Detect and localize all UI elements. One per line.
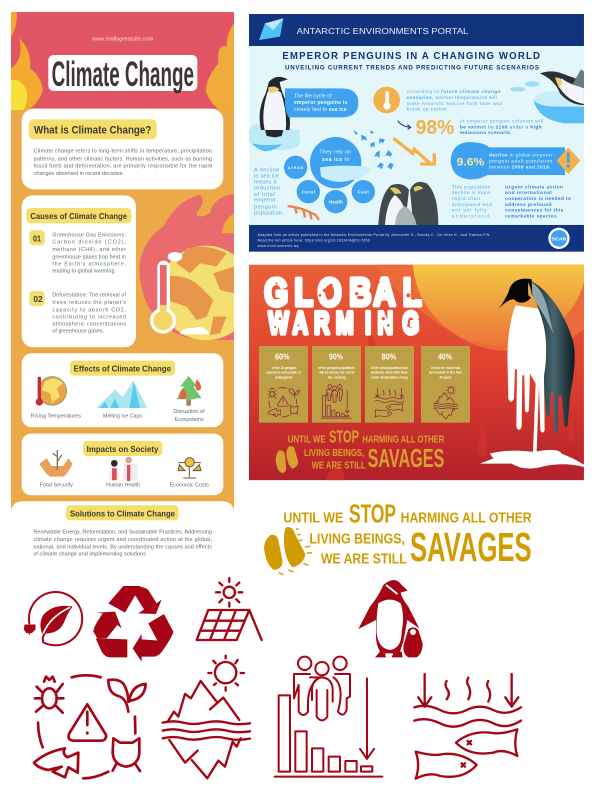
text block: solutions: national, and individual levels. By understanding the causes and effects [33, 544, 212, 550]
icon: left flames [11, 12, 234, 110]
icon: rising temperatures [36, 377, 67, 406]
text block: cause 1: Greenhouse Gas Emissions: [52, 232, 126, 238]
poster background [249, 46, 584, 226]
slogan: standalone: LIVING BEINGS, [309, 531, 405, 547]
header band [249, 14, 584, 46]
text block: population decline: decline is more [452, 190, 490, 196]
heading: solutions: Solutions to Climate Change [70, 508, 175, 518]
card: 80% habitat: of the wild population has [371, 366, 408, 370]
bubble: relies on sea ice: They rely on [319, 150, 351, 156]
label: rising temperatures: Rising Temperatures [31, 413, 81, 419]
footer citation: Adapted from an article published in the Antarctic Environments Portal by Jenouvrier S., Brooks C., De Vries H., and Trathan P.N. [258, 233, 490, 237]
card: 80% habitat: 80% [382, 353, 396, 362]
text block: future scenarios: scenarios, warmer temperatures will [407, 95, 497, 101]
red header band [11, 12, 234, 109]
text block: extinction: emissions scenario. [460, 130, 512, 136]
card: 40% sea ice: of sea ice cover has [431, 366, 460, 370]
panel: Climate Change poster [11, 12, 253, 558]
text block: cause 2: contributing to increased [52, 314, 126, 320]
card: 60% species: species is vulnerable or [266, 371, 302, 375]
slogan: SAVAGES [368, 443, 444, 473]
text block: definition: fossil fuels and deforestation, are primarily responsible for the rapid [34, 164, 212, 170]
card: 80% habitat: under temperature rising [371, 375, 408, 379]
heading: effects [70, 361, 175, 376]
ice floe under penguin [249, 130, 300, 150]
penguin head [499, 279, 532, 309]
panel: poster lower half [249, 130, 584, 252]
icon: krill [288, 206, 319, 220]
text block: sea ice decline: reduction [254, 185, 280, 191]
slogan: standalone [264, 499, 532, 575]
panel: Global Warming poster [249, 264, 584, 480]
text block: urgent action: address profound [505, 202, 552, 208]
poster background [11, 12, 234, 512]
label: disruption of ecosystems: Ecosystems [175, 417, 204, 423]
bubble: fast [352, 180, 375, 203]
callout: life cycle: The life cycle of [294, 93, 332, 99]
penguin belly drips [507, 305, 546, 452]
card: 90% population: the century [328, 375, 346, 379]
melt puddle [480, 450, 584, 468]
text block: population decline: This population [452, 184, 491, 190]
card: 40% sea ice: 40 years [439, 375, 451, 379]
logo: SCAR [548, 228, 570, 249]
text block: cause 2: of greenhouse gases. [52, 329, 104, 335]
icon: penguin with chick [358, 580, 423, 657]
label: economic costs: Economic Costs [170, 482, 209, 488]
text block: cause 1: methane (CH4), and other [52, 247, 126, 253]
text block: future scenarios: According to future climate change [407, 89, 501, 95]
panel: causes of climate change [22, 195, 136, 347]
card: 60% species: 60% [275, 353, 290, 362]
neck highlight [530, 281, 553, 334]
text block: sea ice decline: population. [254, 211, 284, 217]
ice floe shade [252, 143, 282, 151]
card: 90% population: will be lost by the end of [318, 371, 355, 375]
icon: penguin tracks [353, 130, 394, 170]
icon: disruption of ecosystems [177, 376, 202, 406]
slogan: STOP [329, 427, 359, 447]
bubble: health: Health [329, 199, 343, 204]
card: 40% sea ice: decreased in the last [429, 371, 463, 375]
slogan [276, 427, 444, 473]
footer band [249, 225, 584, 252]
bubble: coral: Coral [302, 189, 315, 194]
text block: population decline [452, 184, 492, 220]
label: melting ice caps: Melting Ice Caps [103, 413, 142, 419]
heading: causes [26, 208, 131, 223]
label: disruption of ecosystems [173, 409, 205, 423]
card: 90% population [312, 346, 361, 423]
icons: climate symbols right [275, 580, 521, 779]
logo [259, 18, 283, 40]
text block: extinction: be extinct by 2100 under a high [460, 124, 542, 130]
heading: impacts: Impacts on Society [87, 444, 159, 454]
slogan: standalone: WE ARE STILL [321, 551, 407, 567]
text block: population decline: anticipated and [452, 202, 492, 208]
logo: SCAR: SCAR [552, 236, 567, 242]
text block: sea ice decline: of total [254, 192, 275, 198]
callout: life cycle: emperor penguins is [294, 100, 347, 106]
label: disruption of ecosystems: Disruption of [173, 409, 205, 415]
icon: thermometer badge [373, 87, 400, 113]
heading: effects: Effects of Climate Change [74, 364, 171, 374]
icon: food security [39, 450, 73, 477]
text block: cause 1: the Earth's atmosphere, [52, 261, 126, 267]
icon: melting ice caps [97, 381, 147, 408]
text block: sea ice decline: A decline [254, 168, 279, 174]
text block: future scenarios: break up earlier. [407, 107, 448, 113]
icon: ecosystem warning [268, 388, 300, 417]
panel: Antarctic Environments Portal poster [249, 14, 584, 226]
label: human health: Human Health [106, 482, 140, 488]
badge: 01: 01 [33, 233, 41, 243]
panel: impacts on society [22, 434, 223, 495]
callout: 9.6% decline: 9.6% [457, 156, 484, 168]
slogan: standalone: STOP [349, 499, 396, 529]
text block: solutions: climate change requires urgent and coordinated action at the global, [33, 537, 212, 543]
title: GLOBAL WARMING: GLOBAL [264, 271, 422, 315]
badge: 02: 02 [33, 294, 43, 304]
badge: 02 [29, 291, 45, 306]
card: 60% species: endangered [275, 375, 292, 379]
bubble: relies on sea ice: sea ice to [322, 157, 349, 163]
subtitle: UNVEILING CURRENT TRENDS AND PREDICTING FUTURE SCENARIOS [285, 64, 539, 71]
icon: ecosystem warning [34, 675, 146, 778]
main title: EMPEROR PENGUINS IN A CHANGING WORLD [282, 51, 540, 62]
icon: warming ocean fish [375, 388, 404, 417]
text block: extinction: of emperor penguin colonies will [460, 119, 543, 125]
text block: population decline: rapid than [452, 196, 480, 202]
penguin back [528, 280, 575, 434]
slogan: standalone: SAVAGES [410, 524, 532, 570]
icon: quote marks [276, 446, 298, 473]
text block: future scenarios [407, 89, 502, 113]
icons: climate symbols left [24, 578, 262, 778]
bubble: breed [284, 156, 307, 179]
text block: sea ice decline: penguin [254, 204, 277, 210]
slogan: LIVING BEINGS, [304, 448, 364, 459]
title: GLOBAL WARMING [264, 271, 422, 340]
text block: cause 1: leading to global warming. [52, 269, 116, 275]
thermometer [150, 261, 176, 334]
panel: what is climate change [22, 109, 223, 189]
slogan: UNTIL WE [288, 435, 326, 446]
text block: urgent action: and international [505, 190, 552, 196]
heading: impacts [83, 441, 162, 456]
text block: cause 2: atmospheric concentrations [52, 322, 126, 328]
text block: cause 1: greenhouse gases trap heat in [52, 254, 126, 260]
text block: urgent action: Urgent climate action [505, 184, 563, 190]
illustration: melting penguin [480, 279, 584, 468]
ice floes right [510, 81, 584, 123]
callout: 9.6% decline: decline in global emperor [489, 153, 553, 159]
text block: cause 1 [52, 232, 126, 275]
icon: declining population [275, 657, 382, 777]
icon: plug and leaf [24, 592, 82, 645]
bubble: fast: Fast [358, 189, 369, 194]
card: 80% habitat [365, 346, 414, 423]
poster background [249, 264, 584, 480]
callout: 9.6% decline: penguin adult population [489, 158, 553, 164]
panel: effects of climate change [22, 353, 223, 427]
text block: solutions: Renewable Energy, Reforestation, and Sustainable Practices. Addressing [33, 530, 212, 536]
text block: cause 2: Deforestation: The removal of [52, 293, 127, 299]
title: Climate Change [52, 55, 194, 94]
bubble: coral [297, 180, 320, 203]
icon: diving penguin [540, 69, 584, 105]
heading: solutions [66, 505, 179, 520]
text block: sea ice decline: in sea ice [254, 174, 279, 180]
text block: urgent action: remarkable species. [505, 214, 559, 220]
illustration: flame, globe and thermometer [140, 194, 234, 340]
text block: definition: Climate change refers to long-term shifts in temperature, precipitation [34, 149, 212, 155]
card: 40% sea ice: 40% [438, 353, 452, 362]
text block: cause 1: Carbon dioxide (CO2), [52, 240, 126, 246]
icon: economic costs [178, 458, 201, 478]
text block: definition: changes observed in recent decades. [34, 171, 124, 177]
callout: life cycle: closely tied to sea ice [294, 107, 347, 113]
heading: what is [29, 119, 157, 139]
icon: quote marks [264, 527, 312, 575]
icon: melting iceberg [163, 656, 250, 778]
badge: 01 [29, 230, 45, 245]
icon: human health [108, 457, 137, 481]
icon: emperor penguin [260, 77, 290, 137]
text block: urgent action [505, 184, 571, 220]
title: GLOBAL WARMING: WARMING [269, 305, 419, 340]
callout: 9.6% decline [451, 142, 565, 179]
label: food security: Food Security [40, 482, 73, 488]
callout: life cycle [285, 88, 358, 117]
card: 60% species: of the 18 penguin [272, 366, 296, 370]
arrow: decline [393, 138, 434, 164]
text block: cause 2: capacity to absorb CO2, [52, 307, 126, 313]
card: 40% sea ice [421, 346, 470, 423]
icon: penguin pair with chick [378, 182, 438, 225]
ice floes left [250, 124, 300, 150]
text block: population decline: not yet fully [452, 208, 487, 214]
heading: what is: What is Climate Change? [34, 125, 151, 137]
bubble: breed: areas [288, 165, 304, 170]
penguin feet [265, 130, 283, 137]
card: 90% population: 90% [329, 353, 343, 362]
text block: sea ice decline [254, 168, 284, 217]
text block: urgent action: cooperation is needed to [505, 196, 571, 202]
slogan: standalone: UNTIL WE [283, 510, 344, 526]
text block: cause 2 [52, 293, 127, 335]
text block: extinction [460, 119, 543, 136]
icon: recycle [93, 586, 173, 662]
text block: definition: patterns, and other climatic factors. Human activities, such as burning [34, 156, 212, 162]
text block: sea ice decline: means a [254, 179, 278, 185]
bubble: health [324, 190, 347, 213]
icon: warming ocean fish [414, 674, 521, 779]
footer citation: Read the full article here: https://doi.org/10.18124/d4jt0c-7d56 [258, 239, 370, 243]
slogan: standalone: HARMING ALL OTHER [401, 510, 532, 526]
text block: solutions: of climate change and implementing solutions [33, 552, 146, 558]
icon: solar panel [197, 578, 262, 640]
slogan: WE ARE STILL [312, 461, 366, 472]
icon: melting iceberg [434, 386, 458, 419]
heading: causes: Causes of Climate Change [30, 211, 127, 221]
card: 60% species [259, 346, 308, 423]
arrow: to statistic [398, 121, 411, 129]
statistic: 98%: 98% [416, 117, 455, 139]
text block: definition [34, 149, 212, 177]
footer citation: www.environments.aq [258, 244, 298, 248]
text block: sea ice decline: emperor [254, 198, 276, 204]
text block: cause 2: trees reduces the planet's [52, 300, 126, 306]
text block: future scenarios: make Antarctic sea ice form later and [407, 101, 502, 107]
icon: warning diamond [557, 147, 580, 174]
site address: www.reallygreatsite.com [92, 36, 154, 42]
footer citation [258, 233, 490, 248]
card: 80% habitat: declined, often with lives [371, 371, 408, 375]
card: 90% population: of the penguin population [318, 366, 355, 370]
text block: population decline: understood. [452, 214, 492, 220]
portal name: ANTARCTIC ENVIRONMENTS PORTAL [297, 26, 469, 36]
title [48, 55, 197, 94]
callout: 9.6% decline: between 2009 and 2018. [489, 165, 551, 171]
bubble: relies on sea ice [310, 137, 372, 188]
panel: solutions to climate change [11, 501, 234, 558]
text block: solutions [33, 530, 212, 558]
icon: declining population [321, 385, 351, 418]
slogan: HARMING ALL OTHER [362, 435, 444, 446]
text block: urgent action: consequences for this [505, 208, 564, 214]
